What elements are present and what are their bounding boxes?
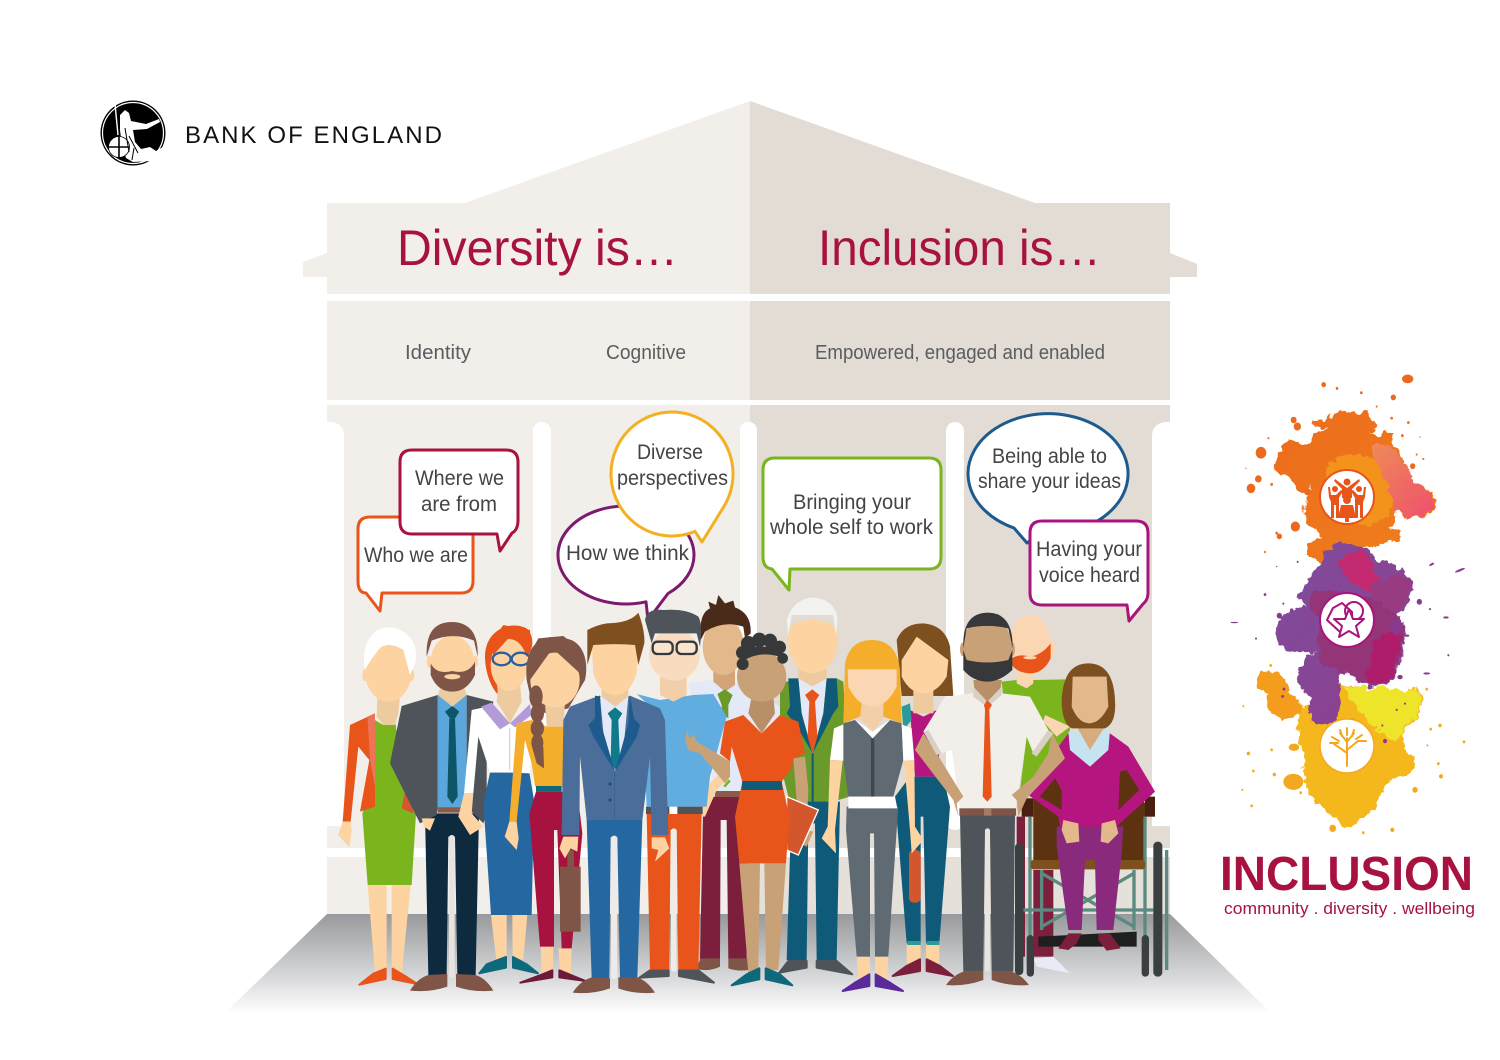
speech bubble: Having your voice heard: voice heard bbox=[1039, 564, 1140, 587]
heading: Diversity is: Diversity is… bbox=[397, 220, 678, 276]
person: man with glasses and blue sweater bbox=[637, 610, 727, 983]
speech bubble: Who we are bbox=[358, 517, 473, 611]
person: man in blue suit bbox=[559, 613, 669, 993]
speech bubble: Diverse perspectives: Diverse bbox=[637, 441, 703, 464]
speech bubble: Who we are: Who we are bbox=[364, 544, 468, 567]
floor bbox=[224, 914, 1272, 1014]
splash: orange bbox=[1245, 375, 1437, 564]
speech bubble: Being able to share your ideas: Being able to bbox=[992, 445, 1107, 468]
person: bald man with ginger beard bbox=[1002, 615, 1070, 973]
splash graphic bbox=[1230, 375, 1465, 834]
person: woman with curly hair, orange dress bbox=[685, 633, 818, 985]
person: blonde woman in grey waistcoat bbox=[822, 640, 923, 991]
building bbox=[303, 101, 1197, 915]
person: woman in green dress bbox=[338, 627, 417, 985]
person: man with spiky hair, green tie bbox=[688, 595, 782, 971]
icon: tree bbox=[1320, 719, 1374, 773]
speech bubble: How we think: How we think bbox=[566, 542, 689, 565]
person: woman with braid and yellow top bbox=[505, 636, 586, 983]
logo seal bbox=[100, 100, 166, 166]
speech bubble: Being able to share your ideas bbox=[968, 414, 1128, 543]
speech bubble: Bringing your whole self to work: Bringing your bbox=[793, 491, 911, 514]
person: bearded man in grey jacket bbox=[390, 622, 493, 991]
icon: community bbox=[1320, 470, 1374, 524]
speech bubble: Bringing your whole self to work: whole self to work bbox=[769, 516, 933, 539]
Inclusion wordmark: INCLUSION bbox=[1220, 848, 1473, 901]
person: woman in wheelchair, magenta cardigan bbox=[1028, 663, 1155, 951]
person: woman with brown hair, magenta top bbox=[893, 623, 953, 976]
label: Empowered, engaged and enabled: Empowered, engaged and enabled bbox=[815, 342, 1105, 364]
logo: Bank of England bbox=[100, 100, 442, 166]
person: bearded man in white shirt, orange tie bbox=[915, 613, 1065, 985]
Inclusion wordmark: community . diversity . wellbeing bbox=[1224, 900, 1475, 918]
speech bubble: How we think bbox=[558, 506, 694, 620]
speech bubble: Having your voice heard: Having your bbox=[1036, 538, 1142, 561]
wheelchair bbox=[1022, 778, 1167, 977]
speech bubble: Where we are from: are from bbox=[421, 493, 497, 516]
person: older man with white hair, green waistcoat bbox=[779, 597, 852, 974]
splash: purple bbox=[1230, 545, 1465, 743]
heading: Inclusion is: Inclusion is… bbox=[818, 220, 1101, 276]
speech bubble: Where we are from bbox=[400, 450, 518, 551]
speech bubble: Diverse perspectives: perspectives bbox=[617, 467, 728, 490]
label: Identity: Identity bbox=[405, 342, 471, 364]
label: Cognitive: Cognitive bbox=[606, 342, 686, 364]
speech bubble: Diverse perspectives bbox=[611, 412, 733, 542]
speech bubble: Having your voice heard bbox=[1030, 521, 1148, 621]
splash: yellow bbox=[1241, 664, 1465, 834]
person: red-haired woman with glasses bbox=[458, 625, 538, 973]
logo wordmark: BANK OF ENGLAND bbox=[185, 122, 442, 149]
speech bubble: Bringing your whole self to work bbox=[763, 458, 941, 590]
speech bubble: Where we are from: Where we bbox=[415, 467, 504, 490]
icon: diversity star bbox=[1320, 593, 1374, 647]
speech bubble: Being able to share your ideas: share your ideas bbox=[978, 470, 1121, 493]
